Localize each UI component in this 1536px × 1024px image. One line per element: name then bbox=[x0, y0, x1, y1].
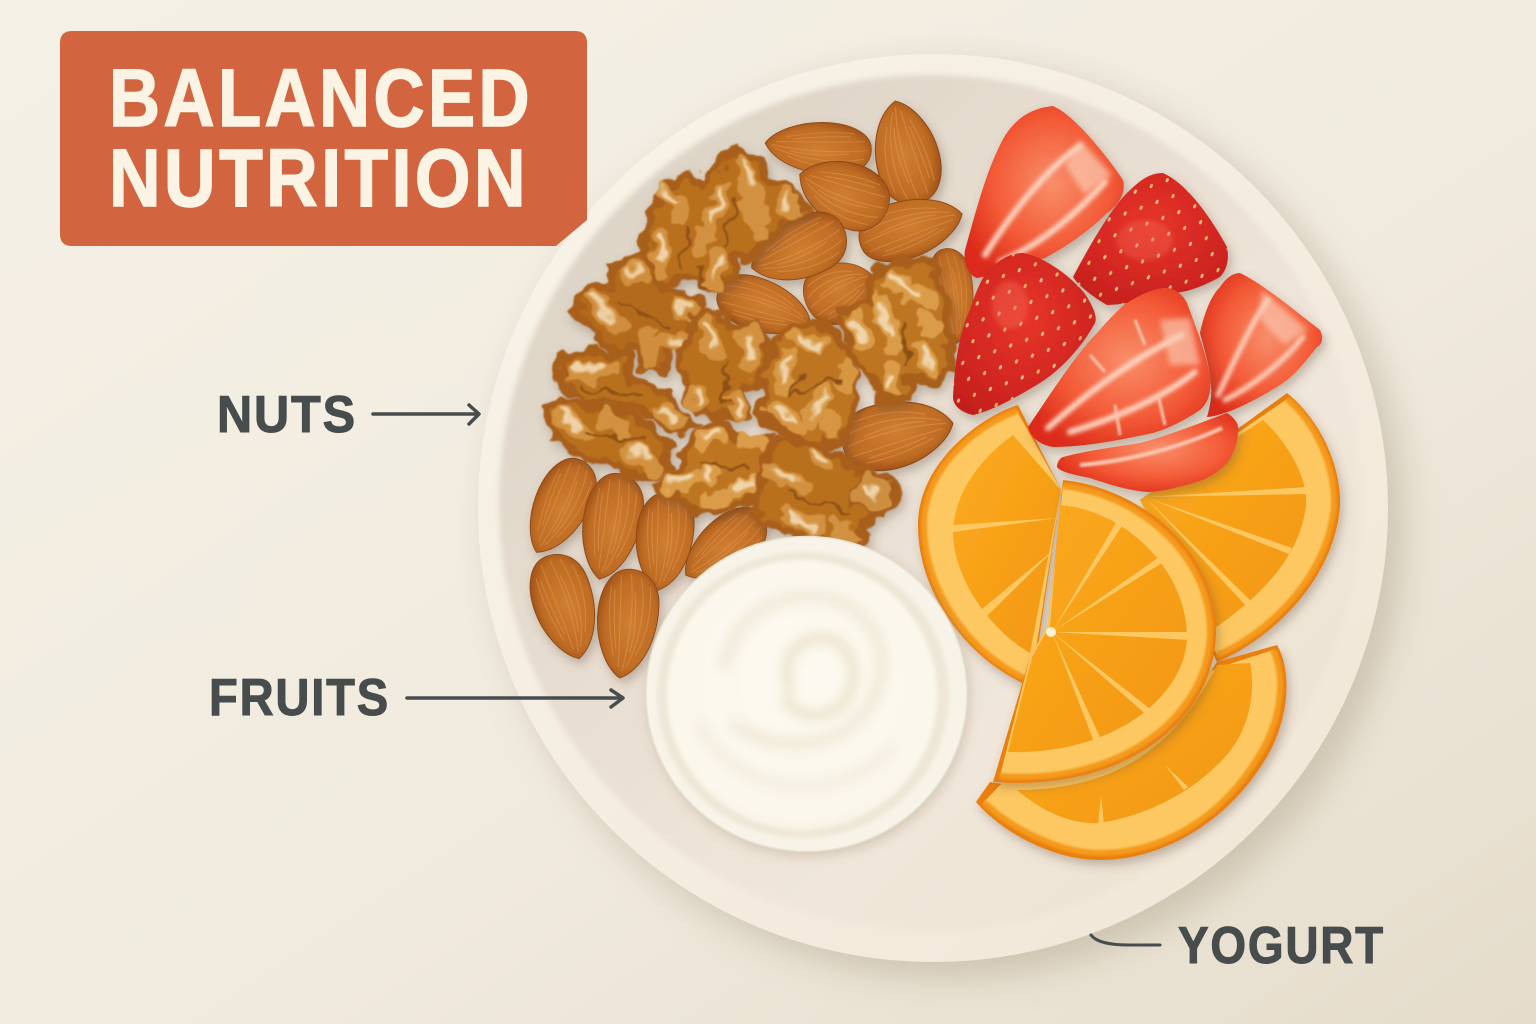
walnut 8 bbox=[657, 417, 773, 513]
walnut 2 bbox=[577, 253, 700, 373]
walnut 5 bbox=[838, 263, 953, 400]
label: nuts bbox=[217, 386, 479, 444]
label: fruits bbox=[209, 669, 623, 727]
yogurt bbox=[667, 560, 937, 830]
arrow: nuts bbox=[373, 405, 479, 424]
walnut 6 bbox=[557, 350, 695, 430]
walnut 7 bbox=[545, 400, 668, 480]
title text bbox=[109, 53, 533, 224]
strawberry: whole right bbox=[1073, 173, 1228, 305]
orange slice: right bbox=[1140, 393, 1340, 662]
strawberry: cut top bbox=[965, 106, 1124, 278]
title text: NUTRITION bbox=[109, 133, 529, 224]
strawberry: slice bbox=[1057, 413, 1238, 492]
label: yogurt: YOGURT bbox=[1178, 917, 1385, 975]
walnuts bbox=[545, 150, 953, 547]
orange slice: center bbox=[993, 480, 1216, 783]
label: fruits: FRUITS bbox=[209, 669, 390, 727]
strawberry: cut center bbox=[1028, 288, 1211, 447]
almonds: lower group bbox=[514, 449, 778, 681]
arrow: yogurt bbox=[1091, 935, 1160, 945]
label: nuts: NUTS bbox=[217, 386, 357, 444]
yogurt bowl bbox=[646, 536, 970, 856]
orange slice: left bbox=[918, 405, 1061, 687]
title banner bbox=[60, 31, 587, 246]
strawberry: cut right bbox=[1200, 273, 1322, 417]
strawberry: whole left bbox=[953, 253, 1096, 415]
walnut 1 bbox=[645, 150, 807, 290]
arrow: fruits bbox=[407, 690, 623, 707]
title text: BALANCED bbox=[109, 53, 533, 144]
label: yogurt bbox=[1091, 917, 1385, 975]
walnut 4 bbox=[763, 323, 860, 443]
walnut 9 bbox=[755, 440, 900, 547]
almonds: upper group bbox=[710, 94, 980, 480]
plate bbox=[478, 54, 1404, 978]
orange slice: bottom bbox=[976, 645, 1286, 860]
walnut 3 bbox=[680, 310, 770, 420]
